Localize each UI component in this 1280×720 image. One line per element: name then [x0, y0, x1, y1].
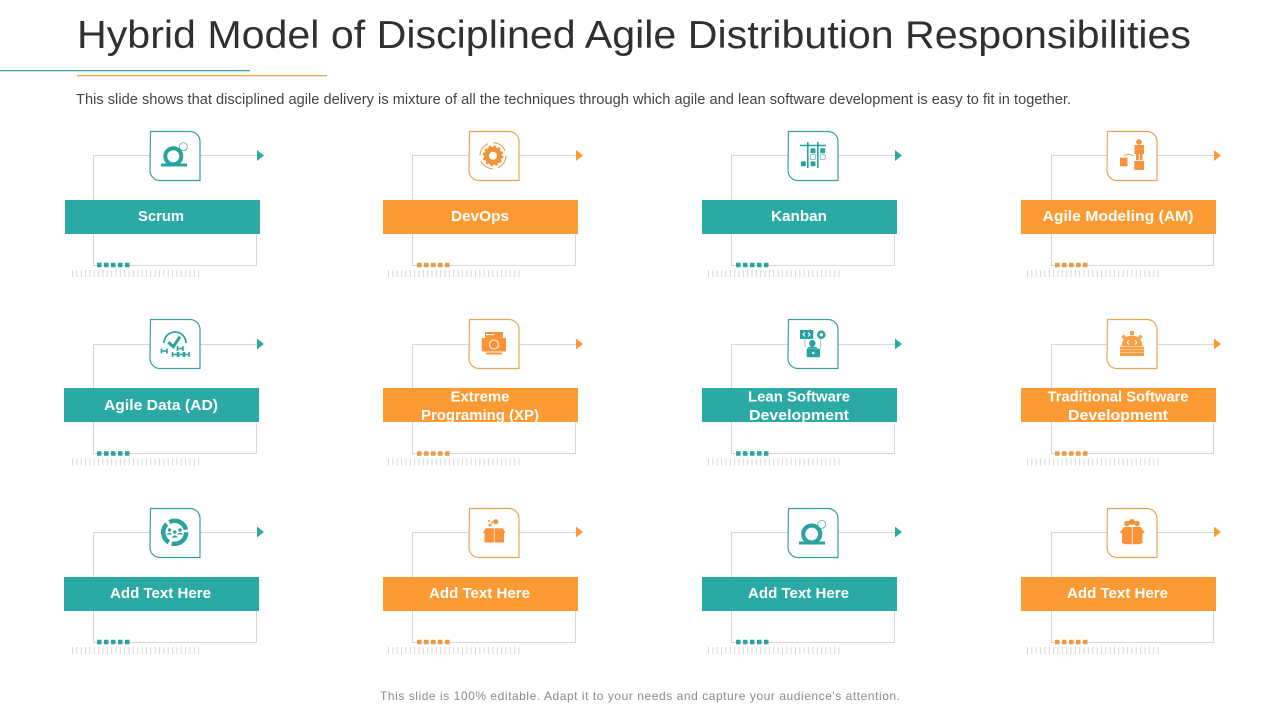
icon box [1107, 132, 1157, 181]
icon box [1107, 320, 1157, 368]
icon: gear and keyboard [1120, 331, 1144, 356]
connector lines [412, 344, 576, 454]
label: Kanban [771, 208, 827, 225]
card: Add Text Here 1 [64, 508, 264, 650]
icon box [788, 320, 838, 368]
tick scale [708, 270, 842, 277]
icon: scrum cycle [799, 520, 826, 544]
dotted accent [1055, 263, 1089, 267]
card: Extreme Programing (XP) [383, 320, 583, 462]
label [421, 388, 539, 424]
dotted accent [736, 640, 770, 644]
card: DevOps [383, 132, 583, 274]
card: Kanban [702, 132, 902, 274]
arrow [257, 150, 264, 161]
icon: open box with dots [483, 519, 506, 542]
label: Agile Modeling (AM) [1042, 208, 1194, 225]
icon: kanban board [800, 142, 826, 168]
bar [383, 200, 578, 234]
bar [702, 200, 897, 234]
card: Agile Modeling (AM) [1021, 132, 1221, 274]
connector lines [732, 344, 895, 454]
label: Development [1068, 407, 1168, 424]
arrow [895, 526, 902, 538]
card: Traditional Software Development [1021, 320, 1221, 462]
connector lines [1052, 532, 1214, 642]
connector lines [732, 532, 895, 642]
label: Development [749, 407, 849, 424]
label: Extreme [450, 388, 510, 406]
icon: gauge with check [162, 332, 189, 357]
arrow [1214, 338, 1221, 350]
icon: scrum cycle [161, 143, 187, 166]
arrow [576, 338, 583, 350]
tick scale [708, 647, 842, 654]
label: Scrum [138, 208, 184, 225]
label: Agile Data (AD) [104, 397, 218, 414]
title underline accents [0, 70, 327, 76]
footer note: This slide is 100% editable. Adapt it to your needs and capture your audience's attention. [380, 689, 900, 703]
card: Add Text Here 2 [383, 508, 583, 650]
label: Add Text Here [748, 585, 849, 602]
icon box [469, 508, 519, 558]
tick scale [1027, 458, 1162, 466]
tick scale [388, 458, 522, 466]
arrow [576, 150, 583, 161]
arrow [257, 338, 264, 350]
dotted accent [417, 640, 451, 644]
label: DevOps [451, 208, 509, 225]
bar [65, 200, 260, 234]
connector lines [732, 156, 895, 266]
bar [383, 577, 578, 611]
label [1048, 388, 1188, 424]
bar [1021, 388, 1216, 422]
icon: team ring [163, 521, 186, 544]
bar [702, 577, 897, 611]
connector lines [94, 344, 257, 454]
bar [64, 388, 259, 422]
arrow [1214, 526, 1221, 538]
connector lines [412, 532, 576, 642]
card: Lean Software Development [702, 320, 902, 462]
connector lines [1052, 156, 1214, 266]
icon box [150, 320, 200, 368]
tick scale [708, 458, 842, 466]
label: Add Text Here [110, 585, 211, 602]
card: Add Text Here 4 [1021, 508, 1221, 650]
icon box [788, 132, 838, 181]
label: Add Text Here [429, 585, 530, 602]
label: Programing (XP) [421, 407, 539, 424]
dotted accent [417, 263, 451, 267]
dotted accent [736, 263, 770, 267]
tick scale [1027, 647, 1162, 654]
label: Traditional Software [1048, 388, 1188, 406]
dotted accent [736, 451, 770, 456]
bar [1021, 200, 1216, 234]
arrow [1214, 150, 1221, 161]
arrow [257, 526, 264, 538]
label: Lean Software [748, 388, 850, 406]
dotted accent [97, 640, 131, 644]
tick scale [72, 270, 202, 277]
arrow [895, 150, 902, 161]
icon box [150, 132, 200, 181]
icon box [469, 320, 519, 368]
icon: monitor with cog [482, 332, 506, 354]
icon box [469, 132, 519, 181]
arrow [895, 338, 902, 350]
connector lines [94, 532, 257, 642]
icon box [150, 508, 200, 558]
label [748, 388, 850, 424]
dotted accent [97, 263, 131, 267]
bar [383, 388, 578, 422]
icon: developer at laptop [800, 330, 824, 357]
card: Scrum [65, 132, 264, 274]
tick scale [72, 458, 202, 466]
dotted accent [97, 451, 131, 456]
tick scale [1027, 270, 1162, 277]
title: Hybrid Model of Disciplined Agile Distribution Responsibilities [77, 14, 1191, 57]
label: Add Text Here [1067, 585, 1168, 602]
icon box [1107, 508, 1157, 558]
icon: person on box [1120, 139, 1144, 170]
dotted accent [417, 451, 451, 456]
connector lines [1052, 344, 1214, 454]
bar [702, 388, 897, 422]
icon: gift box with bow [1119, 519, 1145, 544]
arrow [576, 526, 583, 538]
subtitle: This slide shows that disciplined agile delivery is mixture of all the techniques through which agile and lean software development is easy to fit in together. [76, 92, 1071, 108]
icon: gear with arcs [480, 143, 506, 169]
tick scale [388, 270, 522, 277]
bar [1021, 577, 1216, 611]
bar [64, 577, 259, 611]
icon box [788, 508, 838, 558]
card: Add Text Here 3 [702, 508, 902, 650]
connector lines [412, 156, 576, 266]
tick scale [388, 647, 522, 654]
card: Agile Data (AD) [64, 320, 264, 462]
dotted accent [1055, 640, 1089, 644]
connector lines [94, 156, 257, 266]
dotted accent [1055, 451, 1089, 456]
tick scale [72, 647, 202, 654]
